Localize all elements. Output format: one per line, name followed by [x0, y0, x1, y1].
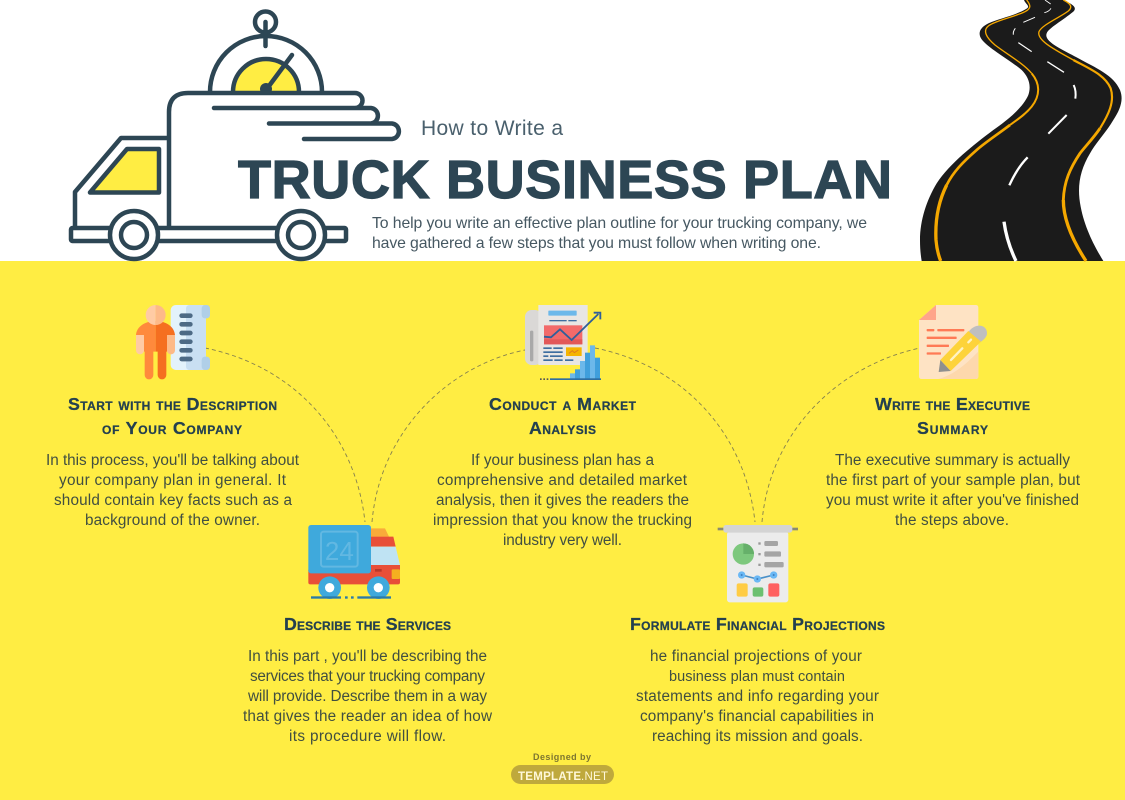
description: If your business plan has a [471, 452, 654, 469]
description: the first part of your sample plan, but [826, 472, 1081, 489]
description: analysis, then it gives the readers the [436, 492, 689, 509]
description: comprehensive and detailed market [437, 472, 688, 489]
icon: winding road [920, 0, 1122, 261]
panel: describe the services [243, 525, 493, 745]
heading [68, 394, 277, 438]
description: your company plan in general. It [59, 472, 287, 489]
heading: Analysis [529, 418, 596, 438]
title: truck business plan: TRUCK BUSINESS PLAN [238, 150, 892, 210]
intro text: have gathered a few steps that you must follow when writing one. [372, 235, 821, 252]
footer: designed by template.net: TEMPLATE [518, 771, 581, 783]
heading: Formulate Financial Projections [630, 614, 885, 634]
heading [875, 394, 1030, 438]
description: should contain key facts such as a [54, 492, 292, 509]
description: the steps above. [895, 512, 1009, 529]
heading: Describe the Services [284, 614, 451, 634]
description: he financial projections of your [650, 648, 862, 665]
description: company's financial capabilities in [640, 708, 874, 725]
heading [489, 394, 637, 438]
title: how to write a: How to Write a [421, 117, 563, 140]
footer: designed by template.net [511, 752, 614, 784]
heading: of Your Company [102, 418, 242, 438]
description: that gives the reader an idea of how [243, 708, 493, 725]
description: impression that you know the trucking [433, 512, 692, 529]
dashed connector arcs [205, 348, 920, 522]
panel: formulate financial projections [630, 525, 885, 745]
description [46, 452, 300, 529]
panel: conduct a market analysis [433, 305, 692, 549]
description: statements and info regarding your [636, 688, 879, 705]
yellow background panel [0, 261, 1125, 800]
panel: write the executive summary [826, 305, 1081, 529]
icon: delivery truck with speedometer [71, 12, 399, 259]
description: background of the owner. [85, 512, 260, 529]
heading: Write the Executive [875, 394, 1030, 414]
panel: start with the description [46, 305, 300, 529]
description [826, 452, 1081, 529]
description: will provide. Describe them in a way [247, 688, 487, 705]
icon: worker and checklist [136, 305, 210, 379]
icon: 24 hour delivery truck: 24 [325, 536, 354, 566]
intro text [372, 215, 867, 252]
description [636, 648, 879, 745]
heading: Summary [917, 418, 988, 438]
intro text: To help you write an effective plan outline for your trucking company, we [372, 215, 867, 232]
description: you must write it after you've finished [826, 492, 1079, 509]
description: business plan must contain [669, 669, 845, 685]
footer: designed by template.net: .NET [581, 771, 608, 783]
description: industry very well. [503, 532, 622, 549]
footer: designed by template.net: Designed by [533, 752, 591, 762]
heading: Start with the Description [68, 394, 277, 414]
heading: Conduct a Market [489, 394, 637, 414]
description: In this part , you'll be describing the [248, 648, 487, 665]
description: The executive summary is actually [835, 452, 1070, 469]
description: services that your trucking company [250, 668, 485, 685]
icon: document and pencil [919, 305, 987, 379]
description [433, 452, 692, 549]
description [243, 648, 493, 745]
icon: market report and bar chart [525, 305, 601, 380]
icon: 24 hour delivery truck [308, 525, 400, 599]
icon: presentation board with charts [718, 525, 798, 602]
description: In this process, you'll be talking about [46, 452, 300, 469]
description: reaching its mission and goals. [652, 728, 863, 745]
description: its procedure will flow. [289, 728, 446, 745]
